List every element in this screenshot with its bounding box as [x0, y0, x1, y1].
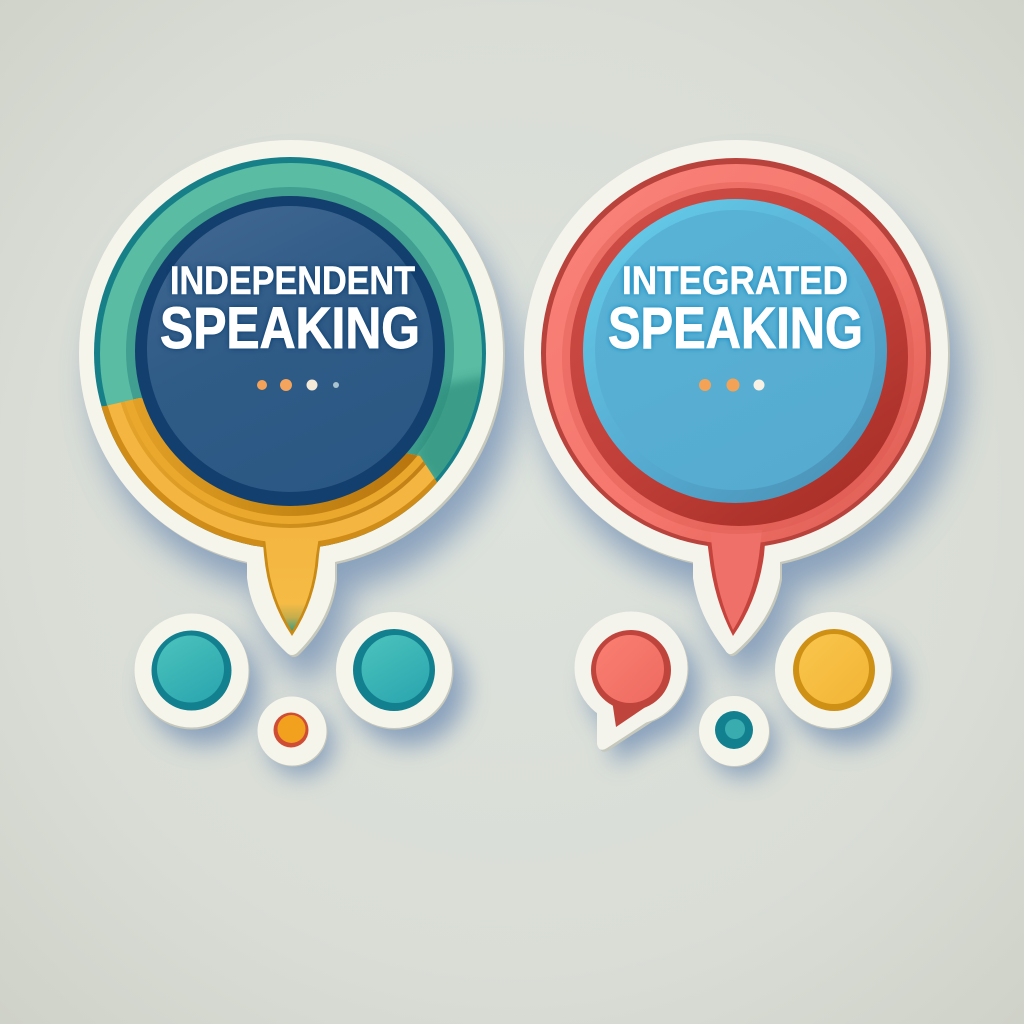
- icon: small teal circle: [699, 696, 777, 777]
- heading: independent speaking: SPEAKING: [160, 296, 420, 361]
- blue disc: [583, 199, 887, 503]
- panel: left small circles: [134, 612, 466, 776]
- teal outer ring: [94, 157, 490, 549]
- panel: integrated speaking bubble: [524, 140, 962, 682]
- bubble cream outline: [79, 140, 503, 655]
- icon: right teal circle: [336, 612, 466, 746]
- heading: integrated speaking: INTEGRATED: [622, 259, 848, 303]
- bubble cream outline: [524, 140, 948, 654]
- navy disc: [135, 196, 445, 506]
- icon: amber circle: [775, 612, 905, 746]
- icon: left teal circle: [134, 614, 261, 745]
- heading: independent speaking: [160, 259, 420, 361]
- heading: independent speaking: INDEPENDENT: [170, 259, 415, 303]
- red outer ring and tail: [541, 158, 931, 636]
- dots: [699, 378, 764, 392]
- heading: integrated speaking: SPEAKING: [608, 296, 863, 361]
- bubble edge: [526, 142, 950, 656]
- bubble edge: [81, 142, 505, 657]
- bubble shadow: [538, 168, 962, 682]
- panel: independent speaking bubble: [79, 140, 517, 683]
- dots: [257, 379, 339, 391]
- heading: independent speaking: INDEPENDENT: [170, 259, 415, 303]
- heading: integrated speaking: [608, 259, 863, 361]
- heading: independent speaking: SPEAKING: [160, 296, 420, 361]
- icon: coral speech bubble: [574, 612, 700, 765]
- amber lower ring and tail: [101, 398, 438, 636]
- icon: small orange circle: [258, 696, 334, 776]
- heading: integrated speaking: SPEAKING: [608, 296, 863, 361]
- panel: right small circles: [574, 612, 905, 777]
- heading: integrated speaking: INTEGRATED: [622, 259, 848, 303]
- bubble shadow: [93, 168, 517, 683]
